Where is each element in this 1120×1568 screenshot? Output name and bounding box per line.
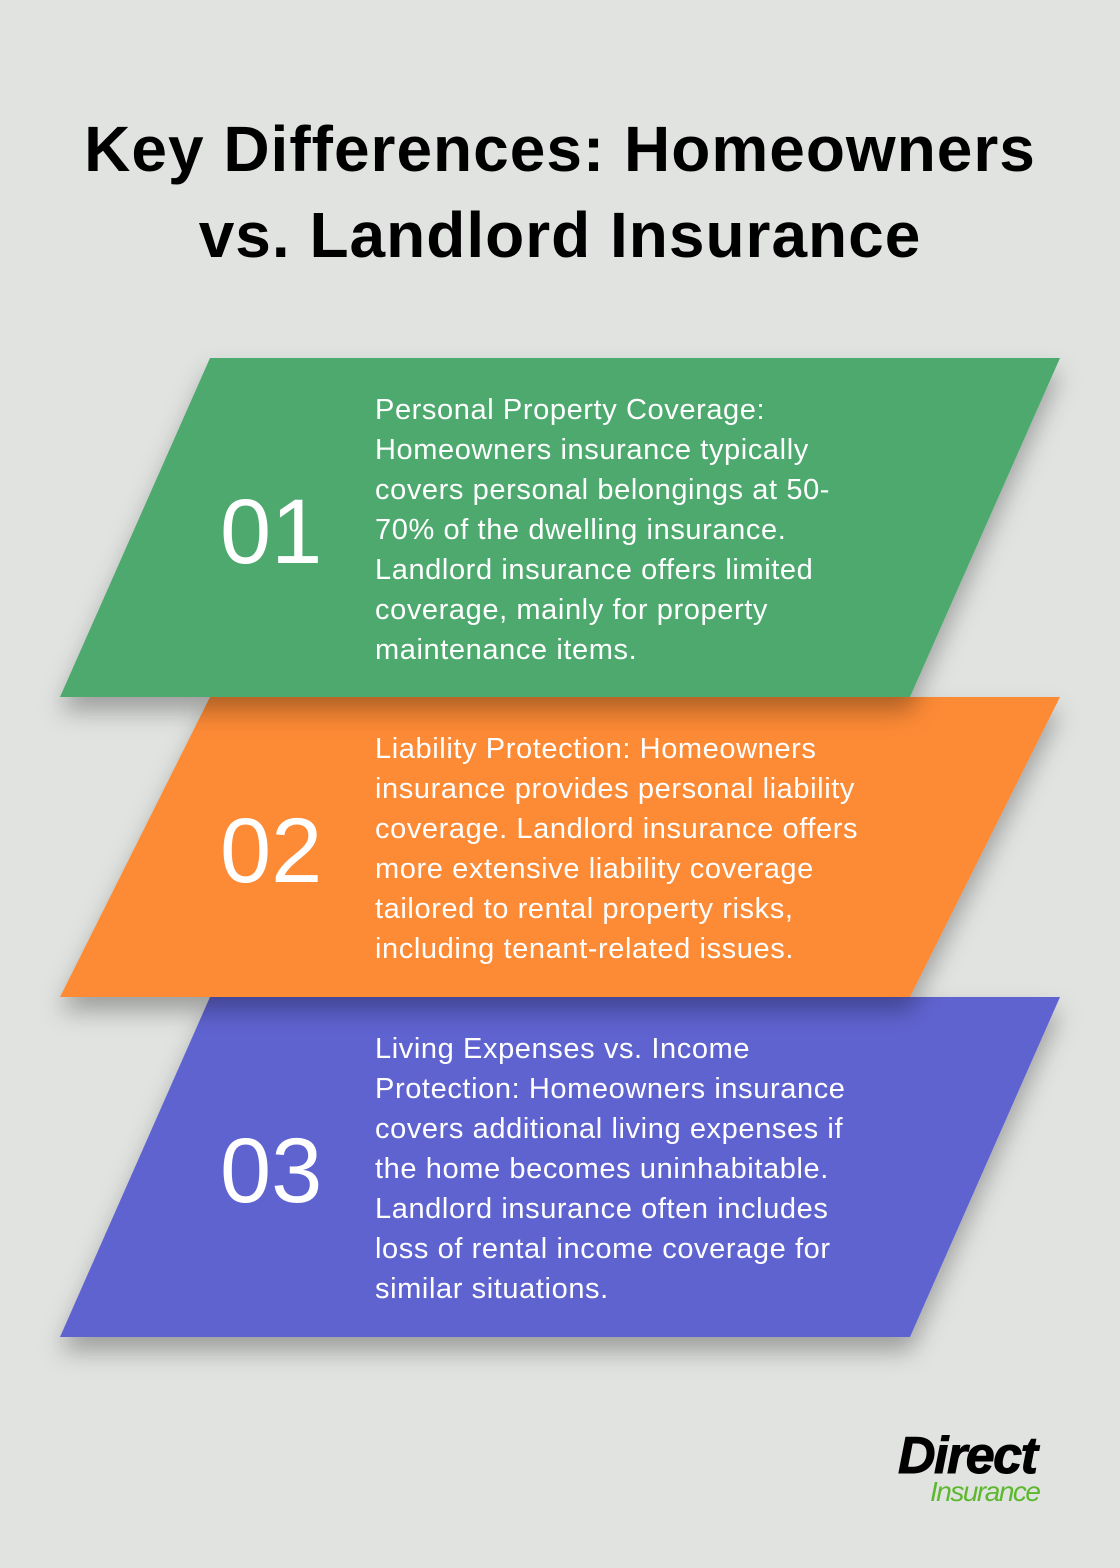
panel: personal property [220, 394, 830, 666]
text 03: Landlord insurance often includes [375, 1193, 828, 1225]
text 01: Homeowners insurance typically [375, 434, 809, 466]
text 02: coverage. Landlord insurance offers [375, 813, 858, 845]
text 01: coverage, mainly for property [375, 594, 768, 626]
text 03: Living Expenses vs. Income [375, 1033, 750, 1065]
text 02: including tenant-related issues. [375, 933, 794, 965]
title [84, 113, 1036, 271]
panel: liability [220, 733, 858, 965]
number 03: 03 [220, 1120, 322, 1222]
text 02 [375, 733, 858, 965]
number 01: 01 [220, 481, 322, 583]
text 01: Personal Property Coverage: [375, 394, 765, 426]
text 02: insurance provides personal liability [375, 773, 855, 805]
text 03: covers additional living expenses if [375, 1113, 843, 1145]
text 01: covers personal belongings at 50- [375, 474, 830, 506]
text 03 [375, 1033, 846, 1305]
text 02: more extensive liability coverage [375, 853, 814, 885]
title: Key Differences: Homeowners [84, 113, 1036, 185]
text 03: Protection: Homeowners insurance [375, 1073, 846, 1105]
logo: Insurance [930, 1476, 1039, 1507]
text 03: similar situations. [375, 1273, 609, 1305]
text 02: Liability Protection: Homeowners [375, 733, 816, 765]
panel: living expenses [220, 1033, 846, 1305]
logo: Direct [898, 1427, 1036, 1485]
text 03: the home becomes uninhabitable. [375, 1153, 829, 1185]
text 01: Landlord insurance offers limited [375, 554, 813, 586]
text 01: 70% of the dwelling insurance. [375, 514, 786, 546]
text 02: tailored to rental property risks, [375, 893, 794, 925]
text 03: loss of rental income coverage for [375, 1233, 831, 1265]
number 02: 02 [220, 800, 322, 902]
title: vs. Landlord Insurance [199, 199, 921, 271]
text 01: maintenance items. [375, 634, 637, 666]
text 01 [375, 394, 830, 666]
